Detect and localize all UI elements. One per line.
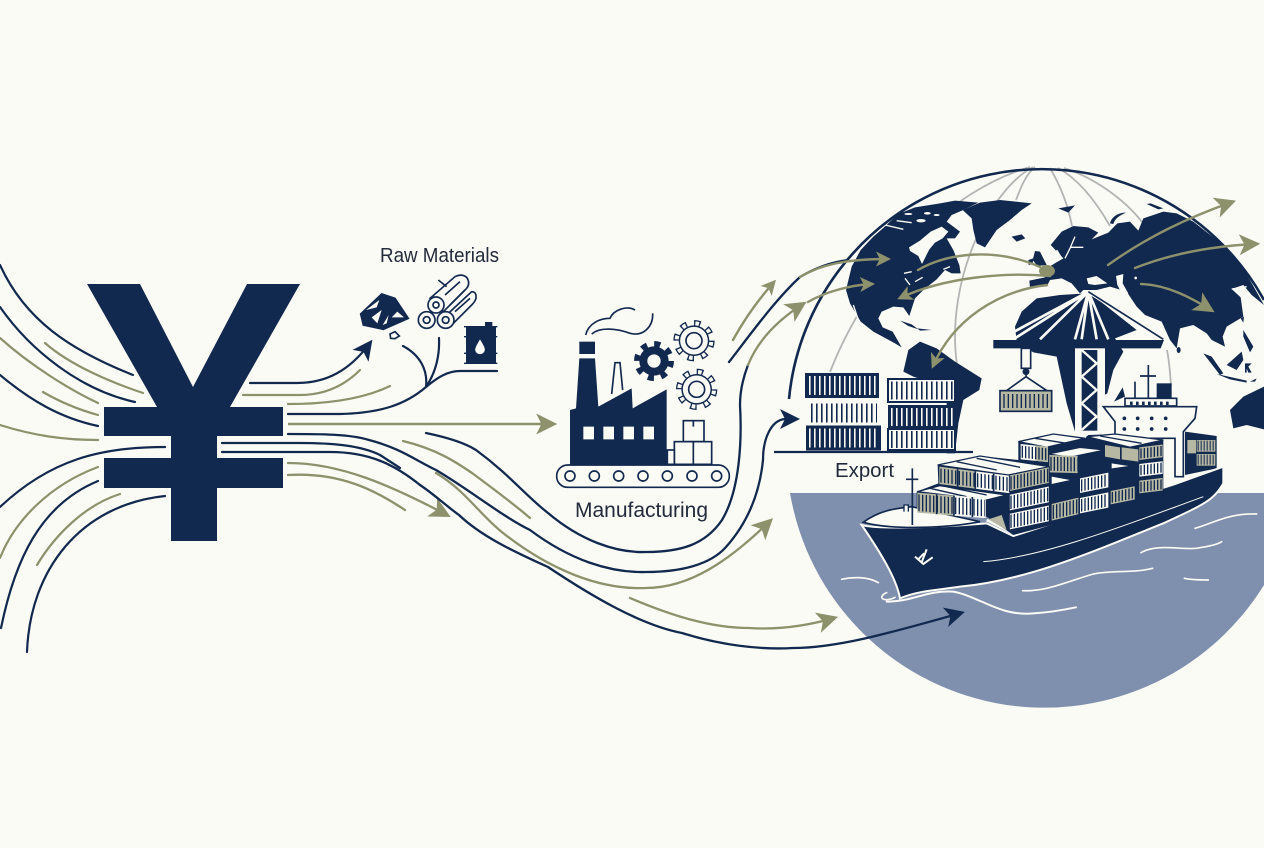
stacked containers on quay — [774, 373, 973, 452]
container tops — [917, 434, 1163, 500]
left container stack — [805, 373, 881, 450]
Europe to South America arrow — [933, 285, 1047, 366]
Java chain — [1217, 374, 1247, 383]
UK and Ireland — [1028, 251, 1047, 266]
navy arrow to ocean — [222, 452, 961, 648]
Asia arrow right — [1135, 244, 1256, 268]
Borneo — [1227, 352, 1243, 370]
Asia arrow southeast — [1141, 284, 1211, 310]
short olive arrow top — [733, 282, 774, 340]
icon: logs — [418, 275, 476, 328]
olive container ends — [988, 445, 1138, 530]
right container stack — [888, 379, 955, 450]
icon: boxes — [667, 421, 712, 464]
arrow into North America lower — [808, 284, 872, 302]
Sulawesi — [1245, 363, 1252, 373]
right container faces — [1009, 467, 1049, 492]
flows into yen from the left — [0, 265, 165, 652]
arctic islands — [1058, 203, 1163, 213]
deck rail — [987, 480, 1175, 533]
olive short curve — [403, 441, 530, 518]
Caribbean islands — [900, 321, 932, 331]
water semicircle — [790, 493, 1264, 708]
Asia arrow top right — [1108, 202, 1232, 265]
icon: ore rock — [361, 294, 408, 339]
cargo mass — [917, 434, 1163, 535]
white gap accents — [1052, 463, 1128, 484]
icon: oil drum — [464, 322, 497, 364]
olive incoming lines — [0, 338, 143, 565]
Madagascar — [1114, 387, 1125, 402]
icon: solid gear — [637, 344, 671, 378]
trade arrows on the globe — [733, 202, 1256, 366]
arrow to ore — [250, 343, 370, 383]
icon: conveyor belt — [557, 465, 729, 487]
icon: outline gear bottom — [679, 372, 714, 407]
crane truss — [1000, 292, 1163, 339]
superstructure — [1103, 365, 1197, 477]
branching line to logs and oil — [288, 338, 497, 414]
navy line merging — [222, 443, 400, 468]
arrow into North America upper — [800, 259, 888, 277]
Iceland — [1012, 234, 1025, 242]
Sri Lanka — [1177, 347, 1181, 353]
crane tower — [1075, 348, 1105, 432]
navy arrow to containers — [288, 419, 796, 572]
arrows from yen to raw materials — [243, 338, 497, 414]
ocean waves — [842, 514, 1257, 614]
Greenland — [963, 200, 1032, 247]
navy incoming lines — [0, 265, 165, 652]
hanging container — [1000, 391, 1052, 411]
cargo containers — [917, 434, 1163, 535]
hull stripe — [983, 497, 1203, 562]
icon: factory — [570, 342, 667, 465]
export label: Export — [835, 460, 894, 482]
Hudson Bay and inland water — [904, 212, 948, 264]
Eurasia — [1029, 212, 1264, 348]
Europe hub — [1039, 265, 1055, 277]
Americas to Europe arc — [918, 254, 1040, 270]
globe outline — [789, 169, 1264, 399]
icon: outline gear top — [677, 323, 711, 358]
inland seas — [1087, 274, 1137, 293]
Europe to North America arrow — [900, 275, 1050, 298]
olive arrow continuing the curve — [748, 304, 803, 365]
New Guinea dot — [1250, 378, 1257, 382]
lower flow lines from yen — [222, 260, 961, 648]
Australia — [1230, 387, 1264, 429]
olive short arrow — [288, 463, 447, 515]
icon: smoke — [586, 308, 653, 335]
crane beam — [993, 340, 1164, 348]
raw materials label: Raw Materials — [380, 245, 499, 267]
olive strokes to raw materials — [243, 370, 390, 404]
navy curve up to North America — [729, 260, 848, 362]
hull — [862, 467, 1223, 598]
yen symbol — [87, 284, 300, 541]
quay ground line — [774, 451, 973, 453]
South America — [903, 342, 982, 453]
crane hook and cables — [1006, 348, 1047, 391]
Malay peninsula — [1203, 353, 1223, 375]
manufacturing label: Manufacturing — [575, 499, 708, 522]
bow deck — [863, 507, 980, 527]
Japan and Philippines — [1241, 317, 1253, 352]
left container faces — [917, 493, 986, 518]
eastern hemisphere land — [1015, 203, 1264, 432]
hull emblem — [915, 549, 933, 564]
olive short stroke — [288, 475, 405, 510]
port crane — [993, 292, 1164, 432]
western hemisphere land — [846, 200, 1047, 453]
arrow to manufacturing — [288, 423, 553, 425]
olive arrow to containers — [436, 473, 770, 588]
olive arrow to ocean — [630, 598, 834, 628]
navy curve around factory — [426, 365, 748, 552]
North America — [846, 201, 978, 347]
bow mooring post — [904, 505, 908, 512]
rear containers — [1185, 432, 1217, 475]
globe meridians — [830, 167, 1171, 385]
factory and manufacturing icon — [557, 308, 729, 487]
Africa — [1015, 293, 1137, 432]
container ship — [862, 365, 1223, 598]
bow mast — [906, 468, 918, 525]
raw materials icons — [361, 275, 497, 364]
globe with world map — [789, 167, 1264, 453]
